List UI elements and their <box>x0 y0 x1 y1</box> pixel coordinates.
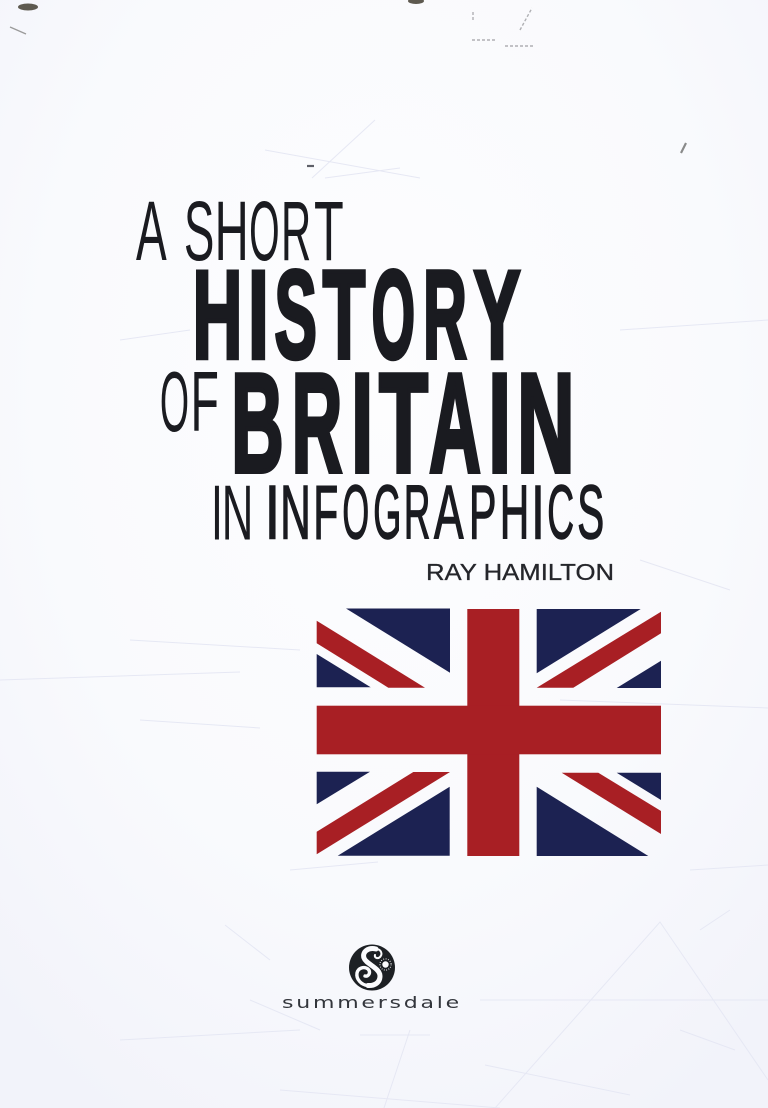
title line: A SHORT: H <box>215 183 249 278</box>
title word: INFOGRAPHICS: O <box>342 471 369 556</box>
title word: INFOGRAPHICS: F <box>313 471 338 556</box>
title line: A SHORT: A <box>136 183 167 278</box>
title word: BRITAIN: R <box>292 344 342 502</box>
title line: HISTORY: I <box>248 244 269 385</box>
title word: IN: N <box>222 468 253 556</box>
title word: INFOGRAPHICS: A <box>434 471 464 556</box>
title word: IN: I <box>211 468 223 556</box>
title word: BRITAIN: I <box>351 344 373 502</box>
title word: INFOGRAPHICS: P <box>469 471 496 556</box>
title <box>136 183 604 556</box>
cover scuffs <box>10 0 686 166</box>
title word: INFOGRAPHICS: I <box>265 471 280 556</box>
title word: INFOGRAPHICS: G <box>373 471 401 556</box>
title word: INFOGRAPHICS: R <box>404 471 430 556</box>
publisher name: summersdale <box>282 993 462 1012</box>
title line: A SHORT: O <box>249 183 280 278</box>
title word: BRITAIN: I <box>488 344 511 502</box>
title word: OF: F <box>190 354 219 450</box>
title line: HISTORY: H <box>193 244 242 385</box>
title word: OF: O <box>160 354 189 450</box>
title word: INFOGRAPHICS: C <box>547 471 574 556</box>
title word: INFOGRAPHICS: N <box>280 471 311 556</box>
title word: BRITAIN: B <box>231 344 284 502</box>
title word: BRITAIN: A <box>429 344 481 502</box>
title word: BRITAIN: T <box>379 344 428 502</box>
title line: HISTORY: O <box>372 244 415 385</box>
title line: HISTORY: T <box>323 244 365 385</box>
title line: HISTORY: S <box>274 244 317 385</box>
title line: A SHORT <box>136 183 344 278</box>
title word: INFOGRAPHICS: S <box>577 471 604 556</box>
title word: INFOGRAPHICS: H <box>500 471 529 556</box>
title word: BRITAIN: N <box>517 344 574 502</box>
title word: INFOGRAPHICS: I <box>531 471 545 556</box>
title line: A SHORT: S <box>184 183 214 278</box>
title line: HISTORY: R <box>423 244 467 385</box>
title line: HISTORY: Y <box>474 244 520 385</box>
logo emblem <box>349 944 395 990</box>
title line: A SHORT: R <box>281 183 311 278</box>
publisher logo <box>282 944 462 1012</box>
author name: RAY HAMILTON <box>426 559 614 585</box>
title line: A SHORT: T <box>314 183 344 278</box>
union jack flag <box>317 608 661 856</box>
